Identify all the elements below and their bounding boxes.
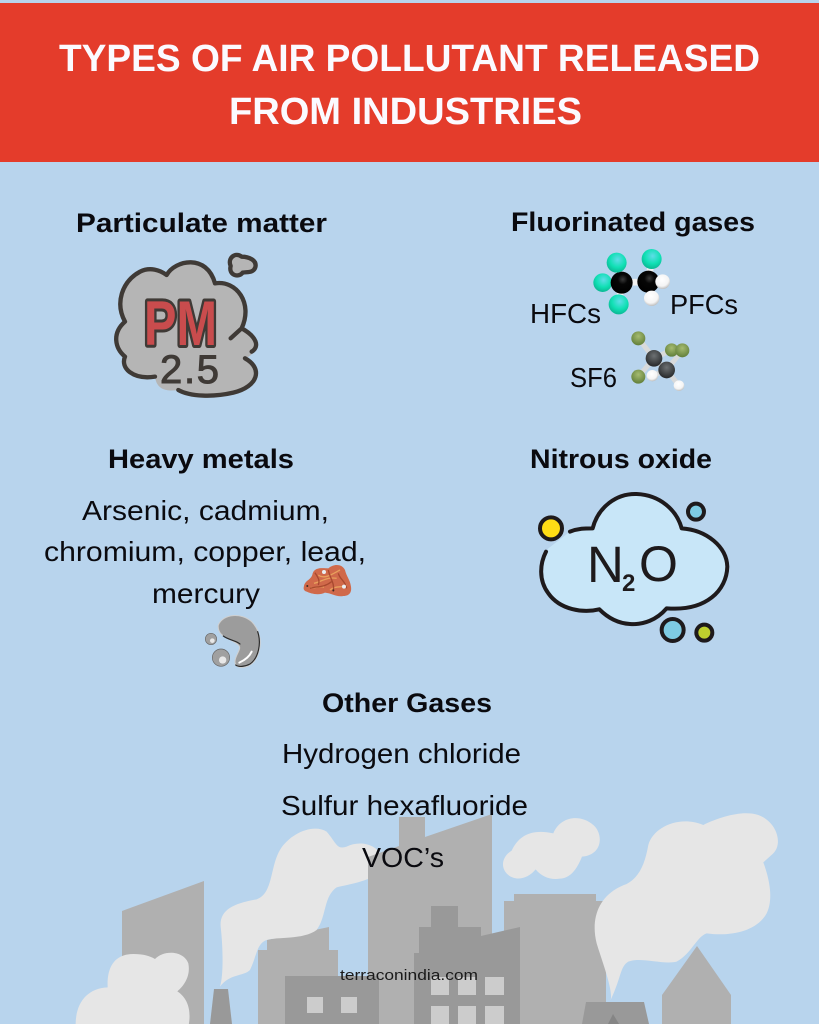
- heading: fluorinated gases: Fluorinated gases: [511, 207, 755, 237]
- icon: mercury droplets: [205, 616, 260, 667]
- central factory with windows: [414, 906, 520, 1024]
- house building: [662, 946, 731, 1024]
- tall central building: [368, 814, 492, 1024]
- icon: PM 2.5 cloud: [116, 255, 256, 396]
- text block: heavy metals list: [44, 495, 366, 609]
- label: HFCs: HFCs: [530, 298, 601, 329]
- N2O label: N: [587, 536, 624, 593]
- bubbles: [540, 517, 562, 539]
- chimney base: [582, 1002, 649, 1024]
- N2O label: O: [639, 536, 678, 592]
- title: TYPES OF AIR POLLUTANT RELEASED: [59, 38, 760, 80]
- building: far left tower: [122, 881, 204, 1024]
- smoke plume: right: [595, 813, 778, 1000]
- smoke plume: left: [220, 829, 385, 987]
- title: [59, 38, 760, 133]
- icon: N2O cloud: [540, 494, 727, 641]
- icon: copper nugget: [304, 565, 351, 596]
- smoke cloud: small middle: [503, 818, 600, 879]
- heading: particulate matter: Particulate matter: [76, 208, 328, 238]
- text block: other gases list: [281, 738, 528, 873]
- label: SF6: SF6: [570, 362, 617, 393]
- text block: heavy metals list: Arsenic, cadmium,: [82, 495, 329, 526]
- right block building: [504, 894, 606, 1024]
- heading: heavy metals: Heavy metals: [108, 444, 294, 474]
- heading: nitrous oxide: Nitrous oxide: [530, 444, 712, 474]
- molecule: HFC and PFC: [593, 249, 670, 314]
- chimney: [210, 989, 232, 1024]
- heading: other gases: Other Gases: [322, 688, 492, 718]
- text block: heavy metals list: mercury: [152, 578, 260, 609]
- title: FROM INDUSTRIES: [229, 91, 582, 133]
- N2O label: [587, 536, 678, 597]
- smoke cloud: bottom left: [76, 953, 190, 1024]
- text block: other gases list: Sulfur hexafluoride: [281, 790, 528, 821]
- stepped building: [258, 927, 338, 1024]
- text block: other gases list: VOC’s: [362, 842, 444, 873]
- small puff: [230, 255, 256, 275]
- molecule: SF6: [631, 331, 689, 391]
- PM label: PM: [144, 289, 217, 359]
- text block: heavy metals list: chromium, copper, lead,: [44, 536, 366, 567]
- text block: other gases list: Hydrogen chloride: [282, 738, 521, 769]
- low front building: [285, 976, 379, 1024]
- N2O label: 2: [622, 570, 635, 597]
- title banner: [0, 3, 819, 162]
- 2.5 label: 2.5: [160, 348, 219, 392]
- website credit: terraconindia.com: [340, 967, 478, 984]
- factory skyline illustration: [76, 813, 778, 1024]
- label: PFCs: PFCs: [670, 289, 738, 320]
